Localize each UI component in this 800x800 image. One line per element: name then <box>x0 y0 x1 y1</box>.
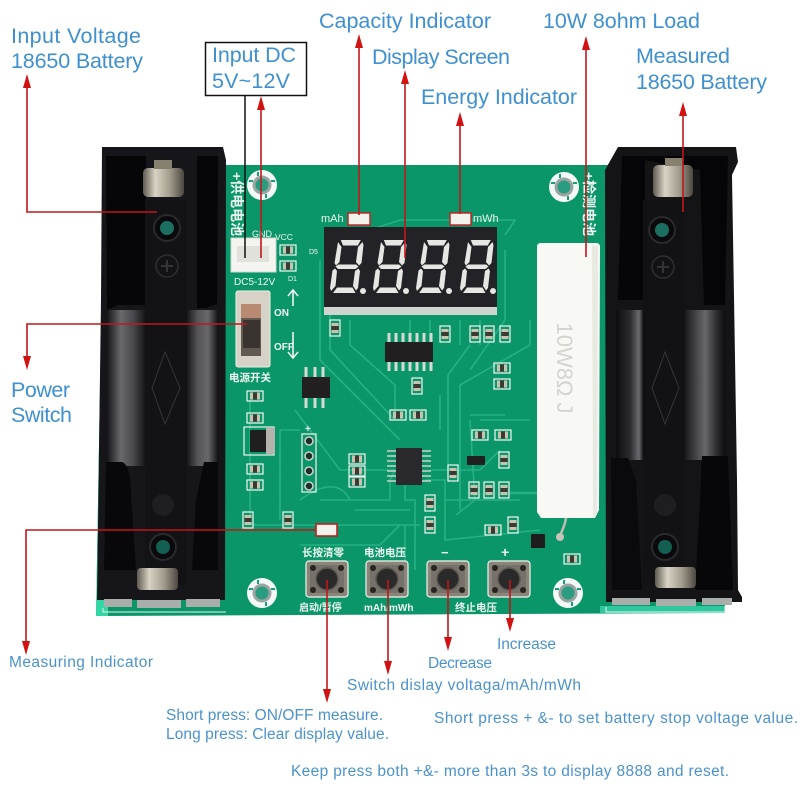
callout: measured 18650 battery <box>636 44 767 212</box>
integrated circuits <box>244 333 545 548</box>
callout: energy indicator: Energy Indicator <box>421 85 577 109</box>
button silkscreen labels: + <box>501 544 509 560</box>
power switch: ON <box>274 308 289 319</box>
callout: switch display button <box>347 580 581 694</box>
button silkscreen labels: − <box>441 545 449 560</box>
button silkscreen labels: 长按清零 <box>302 546 344 559</box>
power switch: 电源开关 <box>229 371 271 384</box>
callout: capacity indicator <box>319 9 491 215</box>
silkscreen: supply battery label: +供电电池 <box>229 172 245 236</box>
callout: decrease button <box>428 580 492 672</box>
mAh and mWh labels: mWh <box>473 213 499 225</box>
connector: DC5-12V <box>234 277 275 288</box>
callout: input DC <box>206 42 306 258</box>
callout: on/off and clear button: Short press: ON/OFF measure. <box>166 707 383 724</box>
callout: energy indicator <box>421 85 577 214</box>
callout: increase button: Increase <box>497 636 556 653</box>
seven-segment digits <box>330 240 496 294</box>
mounting holes <box>247 170 583 608</box>
button silkscreen labels: 终止电压 <box>455 601 497 614</box>
callout: load resistor: 10W 8ohm Load <box>543 9 700 33</box>
right battery holder <box>605 147 742 612</box>
note: reset: Keep press both +&- more than 3s to display 8888 and reset. <box>291 763 729 780</box>
connector: VCC <box>275 232 293 242</box>
header pads: + <box>305 424 311 435</box>
callout: input voltage 18650 battery: 18650 Battery <box>11 49 143 73</box>
callout: power switch: Switch <box>11 403 72 427</box>
push buttons <box>306 561 530 597</box>
circuit board <box>96 165 725 616</box>
button silkscreen labels <box>299 544 509 614</box>
display screen <box>324 227 497 315</box>
power switch: OFF <box>274 342 294 353</box>
callout: measuring indicator <box>9 530 316 671</box>
diodes: D5 <box>309 249 318 256</box>
power switch <box>229 290 298 384</box>
mAh and mWh labels: mAh <box>321 213 344 225</box>
measuring indicator LED <box>316 524 337 536</box>
silkscreen: measured battery label: +检测电池 <box>581 172 597 236</box>
board traces <box>245 220 540 590</box>
note: stop voltage: Short press + &- to set battery stop voltage value. <box>434 710 798 727</box>
callout: decrease button: Decrease <box>428 655 492 672</box>
connector <box>231 229 293 288</box>
connector: GND <box>252 229 272 239</box>
callout: increase button <box>497 580 556 653</box>
button silkscreen labels: 电池电压 <box>364 546 406 559</box>
callout: load resistor <box>543 9 700 257</box>
callout: input DC: Input DC <box>212 43 296 67</box>
callout: input DC: 5V~12V <box>212 69 291 93</box>
callout: input voltage 18650 battery <box>11 24 157 212</box>
callout: display screen <box>372 45 510 258</box>
callout: measured 18650 battery: 18650 Battery <box>636 70 767 94</box>
left battery holder <box>97 147 226 612</box>
callout: display screen: Display Screen <box>372 45 510 69</box>
callout: power switch <box>11 324 247 427</box>
callout: measuring indicator: Measuring Indicator <box>9 654 153 671</box>
button silkscreen labels: mAh/mWh <box>364 603 413 614</box>
button silkscreen labels: 启动/暂停 <box>299 601 342 614</box>
mAh and mWh labels <box>321 213 499 225</box>
load resistor: 10W8Ω J <box>552 322 577 414</box>
load resistor <box>537 243 600 541</box>
header pads <box>302 424 316 492</box>
callout: switch display button: Switch dislay voltaga/mAh/mWh <box>347 677 581 694</box>
diodes: D1 <box>288 276 297 283</box>
callout: input voltage 18650 battery: Input Voltage <box>11 24 141 48</box>
small components <box>243 320 580 564</box>
callout: capacity indicator: Capacity Indicator <box>319 9 491 33</box>
callout: on/off and clear button: Long press: Clear display value. <box>166 726 389 743</box>
callout: measured 18650 battery: Measured <box>636 44 730 68</box>
callout: power switch: Power <box>11 378 70 402</box>
callout: on/off and clear button <box>166 580 389 743</box>
diodes <box>280 245 318 283</box>
